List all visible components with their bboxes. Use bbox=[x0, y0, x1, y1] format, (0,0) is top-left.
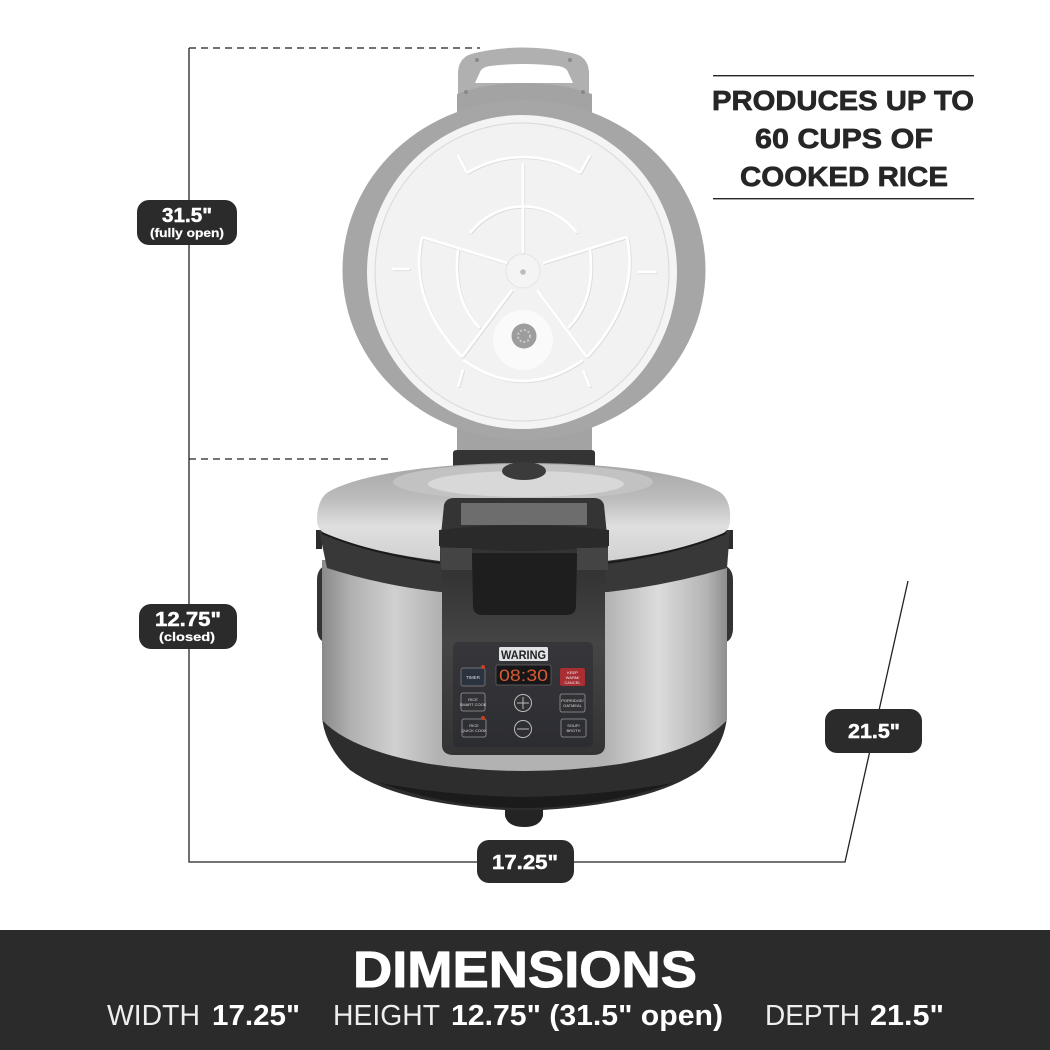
open lid bbox=[342, 48, 706, 453]
lid rim bbox=[342, 100, 706, 440]
button: plus bbox=[514, 694, 532, 712]
timer display: 08:30 bbox=[499, 666, 548, 685]
callout: capacity: 60 CUPS OF bbox=[755, 123, 933, 154]
base vent bbox=[380, 783, 673, 808]
lid rim line bbox=[322, 533, 726, 563]
label: depth bbox=[825, 709, 922, 753]
lid hinge bbox=[457, 425, 592, 453]
button: porridge: PORRIDGE/ bbox=[561, 698, 585, 703]
hinge block bbox=[453, 450, 595, 470]
label: width bbox=[477, 840, 574, 883]
button: rice smart cook bbox=[460, 693, 487, 711]
button: soup bbox=[561, 719, 586, 737]
lid dome bbox=[393, 464, 653, 500]
button: soup: SOUP/ bbox=[567, 723, 581, 728]
label: height closed bbox=[139, 604, 237, 649]
label: height fully open: (fully open) bbox=[150, 226, 224, 240]
lid rib shadows bbox=[393, 156, 658, 388]
lid knob bbox=[502, 462, 546, 480]
button: timer: TIMER bbox=[466, 675, 481, 680]
steel body bbox=[322, 560, 727, 771]
button: rice quick cook: QUICK COOK bbox=[461, 728, 487, 733]
depth summary: DEPTH bbox=[765, 1000, 860, 1032]
button: rice smart cook: RICE bbox=[468, 697, 478, 702]
label: height fully open: 31.5" bbox=[162, 205, 212, 227]
width summary: 17.25" bbox=[212, 1000, 300, 1032]
button: rice quick cook bbox=[461, 716, 487, 737]
width summary: WIDTH bbox=[107, 1000, 200, 1032]
button: porridge: OATMEAL bbox=[563, 703, 583, 708]
label: depth: 21.5" bbox=[848, 721, 900, 743]
lid hub bbox=[506, 254, 540, 288]
side handles bbox=[316, 530, 733, 549]
button: soup: BROTH bbox=[566, 728, 581, 733]
button: keep warm: WARM/ bbox=[566, 675, 580, 680]
latch ledge bbox=[439, 525, 609, 551]
depth summary bbox=[765, 1000, 944, 1032]
brand logo: WARING bbox=[501, 648, 546, 662]
dark base bbox=[322, 716, 727, 811]
callout: capacity bbox=[712, 75, 974, 199]
lid centre disc bbox=[428, 471, 624, 497]
button: rice smart cook: SMART COOK bbox=[460, 702, 487, 707]
label: height fully open bbox=[137, 200, 237, 245]
label: width: 17.25" bbox=[492, 852, 558, 874]
heading: dimensions: DIMENSIONS bbox=[353, 941, 697, 998]
lid steam valve bbox=[493, 310, 553, 370]
button: rice quick cook: RICE bbox=[469, 723, 479, 728]
button: keep warm: CANCEL bbox=[564, 680, 581, 685]
rice cooker body bbox=[316, 450, 733, 827]
height summary: HEIGHT bbox=[333, 1000, 440, 1032]
callout: capacity: PRODUCES UP TO bbox=[712, 85, 974, 116]
latch top bbox=[440, 498, 608, 570]
latch grip recess bbox=[461, 503, 587, 525]
control panel bbox=[453, 642, 593, 747]
height summary bbox=[333, 1000, 723, 1032]
label: height closed: 12.75" bbox=[155, 609, 221, 631]
dark shoulder bbox=[319, 530, 730, 592]
foot bbox=[505, 810, 543, 827]
callout: capacity: COOKED RICE bbox=[740, 161, 948, 192]
width summary bbox=[107, 1000, 300, 1032]
lid inner bbox=[367, 115, 677, 429]
latch tab bbox=[472, 553, 577, 615]
button: timer bbox=[461, 665, 485, 686]
button: keep warm bbox=[560, 668, 585, 686]
silver lid top bbox=[317, 463, 730, 566]
button: minus bbox=[514, 720, 532, 738]
lid inner plate bbox=[375, 123, 669, 421]
control housing bbox=[439, 498, 609, 755]
label: height closed: (closed) bbox=[159, 630, 215, 644]
lid ribs bbox=[392, 155, 657, 387]
latch side clips bbox=[440, 548, 608, 570]
depth summary: 21.5" bbox=[870, 1000, 944, 1032]
button: porridge bbox=[560, 694, 585, 712]
button: keep warm: KEEP bbox=[567, 670, 578, 675]
bottom dimensions band bbox=[0, 930, 1050, 1050]
dimension lines bbox=[189, 48, 908, 862]
lid handle bbox=[457, 48, 592, 125]
height summary: 12.75" (31.5" open) bbox=[451, 1000, 723, 1032]
